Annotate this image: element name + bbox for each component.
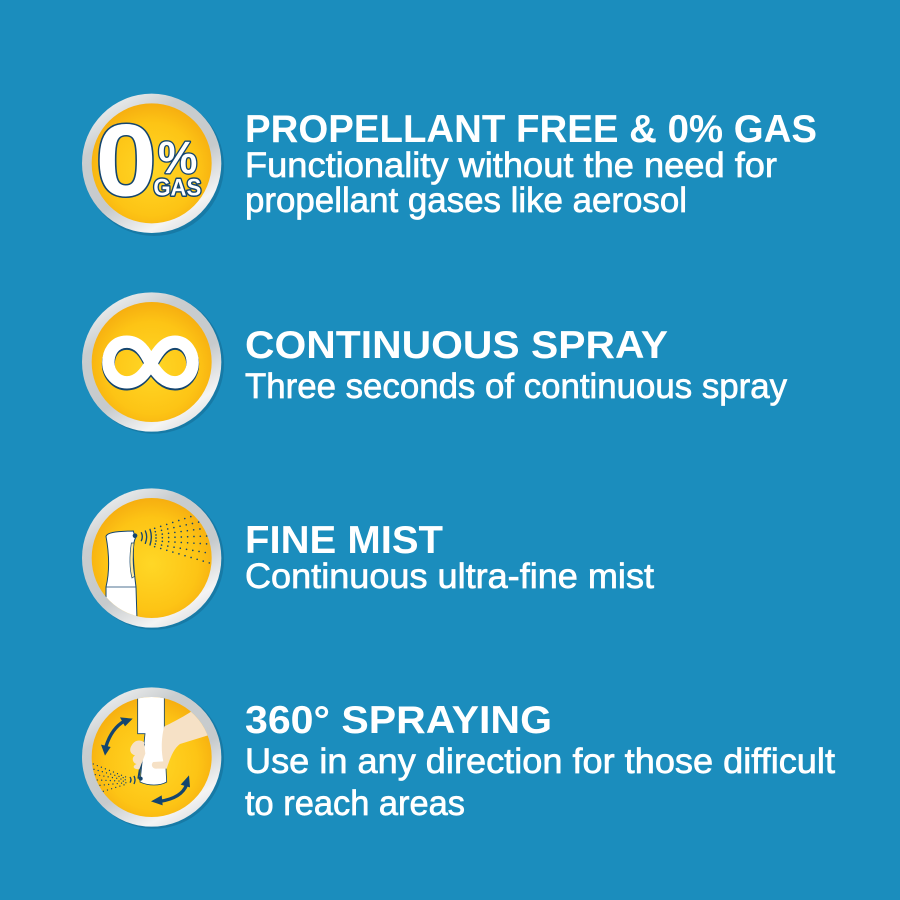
icon: 0% gas: 0 <box>95 103 157 217</box>
text: description: Three seconds of continuous spray <box>245 367 787 406</box>
row: propellant free <box>82 94 817 236</box>
row: fine mist <box>82 488 654 630</box>
text: description line 2: propellant gases like aerosol <box>245 181 687 220</box>
heading: PROPELLANT FREE & 0% GAS <box>245 108 817 151</box>
row: 360 spraying <box>82 687 835 829</box>
heading: CONTINUOUS SPRAY <box>245 324 668 367</box>
icon: 0% gas <box>82 94 224 236</box>
text: description: Functionality without the need for <box>245 146 777 185</box>
icon: spray bottle mist <box>82 488 224 630</box>
icon: 360 spraying hand <box>82 687 224 829</box>
text: description line 2: to reach areas <box>245 784 465 823</box>
icon: infinity <box>82 292 224 434</box>
heading: 360° SPRAYING <box>245 699 552 742</box>
text: description: Continuous ultra-fine mist <box>245 557 654 596</box>
icon: 0% gas: % <box>158 132 197 183</box>
heading: FINE MIST <box>245 519 443 562</box>
text: description: Use in any direction for those difficult <box>245 742 835 781</box>
icon: 0% gas: GAS <box>153 175 201 202</box>
row: continuous spray <box>82 292 787 434</box>
